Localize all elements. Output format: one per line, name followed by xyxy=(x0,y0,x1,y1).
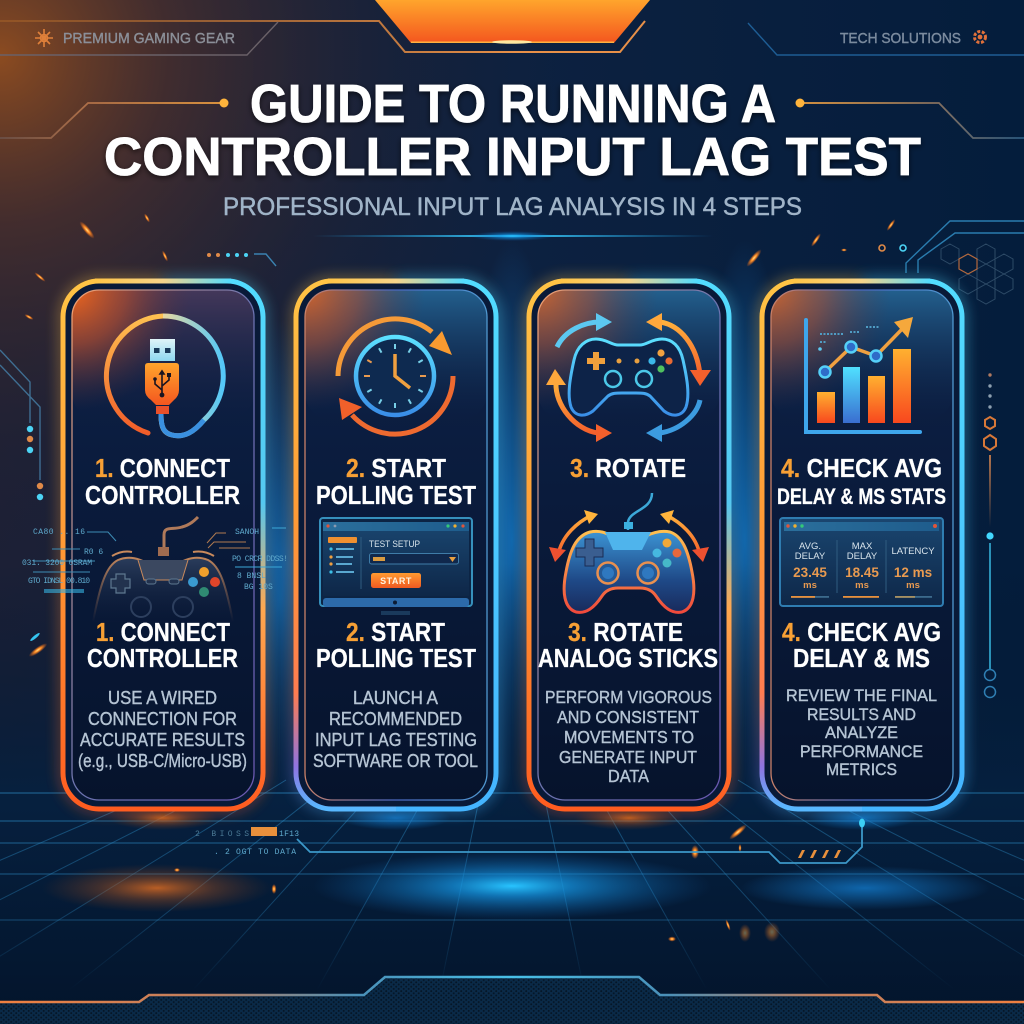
description: step 2: SOFTWARE OR TOOL xyxy=(313,751,478,771)
heading: step 1 lower: 1. CONNECT xyxy=(96,619,230,647)
stats window: 12 ms xyxy=(894,565,932,580)
panel: step 1 xyxy=(22,281,288,809)
stats window: ms xyxy=(855,580,869,591)
monitor: test setup window: START xyxy=(380,576,412,586)
title connector lines xyxy=(0,98,1024,138)
heading: step 2 lower: 2. START xyxy=(346,619,445,647)
description: step 4: RESULTS AND xyxy=(807,706,916,724)
description: step 1 xyxy=(78,688,247,771)
icon: controller with rotation arrows xyxy=(546,313,711,442)
description: step 4 xyxy=(786,687,937,779)
stats window: ms xyxy=(906,580,920,591)
heading: step 2 upper: 2. START xyxy=(346,455,446,483)
description: step 3: MOVEMENTS TO xyxy=(564,727,694,747)
stats window: DELAY xyxy=(795,551,826,562)
title: CONTROLLER INPUT LAG TEST xyxy=(104,127,921,187)
heading: step 3 lower: 3. ROTATE xyxy=(568,619,683,647)
stats window: 18.45 xyxy=(845,565,879,580)
spark: cyan xyxy=(29,632,41,642)
glowing divider xyxy=(313,231,713,241)
top center orange trapezoid xyxy=(375,0,650,44)
heading: step 1 upper: 1. CONNECT xyxy=(95,455,230,483)
icon: gamepad with analog stick arrows xyxy=(549,493,709,612)
title xyxy=(104,74,921,187)
description: step 3: AND CONSISTENT xyxy=(557,707,699,727)
data readouts around controller: SANOH xyxy=(235,528,259,537)
title: GUIDE TO RUNNING A xyxy=(250,74,776,134)
description: step 1: USE A WIRED xyxy=(108,688,217,708)
icon: clock with cycle arrows xyxy=(338,319,453,434)
subheading: analog sticks: ANALOG STICKS xyxy=(538,645,718,673)
description: step 1: CONNECTION FOR xyxy=(88,709,237,729)
floor grid xyxy=(0,780,1024,990)
heading: step 4 upper: 4. CHECK AVG xyxy=(781,455,942,483)
left circuit decoration xyxy=(0,350,43,500)
description: step 4: REVIEW THE FINAL xyxy=(786,687,937,705)
icon: bar chart with trend arrow xyxy=(806,317,920,432)
data readouts around controller: GTO IDNSL 00.810 xyxy=(28,577,90,586)
panel frame 1 xyxy=(63,281,263,809)
subheading: polling test lower: POLLING TEST xyxy=(316,645,476,673)
description: step 4: ANALYZE xyxy=(825,724,898,742)
description: step 3: DATA xyxy=(608,766,649,786)
data readouts around controller: PO CRCR DDSS! xyxy=(232,555,288,564)
panel frame 3 xyxy=(529,281,729,809)
lower data labels: . 2 OGT TO DATA xyxy=(214,848,296,857)
description: step 2: RECOMMENDED xyxy=(329,709,462,729)
subheading: polling test upper: POLLING TEST xyxy=(316,482,476,510)
stats window: ms xyxy=(803,580,817,591)
icon: wired controller xyxy=(93,517,233,622)
lower data labels xyxy=(195,827,299,857)
description: step 3: PERFORM VIGOROUS xyxy=(545,687,712,707)
brand: premium gaming gear: PREMIUM GAMING GEAR xyxy=(63,31,235,47)
lower data labels: 2 BIOSS xyxy=(195,830,249,839)
subtitle: PROFESSIONAL INPUT LAG ANALYSIS IN 4 STEPS xyxy=(223,193,802,221)
icon: premium gaming gear star xyxy=(35,29,53,47)
stats window: AVG. xyxy=(799,541,821,552)
data readouts around controller xyxy=(22,528,288,593)
stats window xyxy=(780,518,943,606)
description: step 3: GENERATE INPUT xyxy=(559,747,697,767)
subheading: controller upper: CONTROLLER xyxy=(85,482,240,510)
stats window: LATENCY xyxy=(891,546,935,557)
description: step 4: METRICS xyxy=(826,761,897,779)
description: step 2 xyxy=(313,688,478,771)
description: step 1: ACCURATE RESULTS xyxy=(80,730,245,750)
stats window: DELAY xyxy=(847,551,878,562)
heading: step 3 upper: 3. ROTATE xyxy=(570,455,686,483)
data readouts around controller: CA80 .. 16 xyxy=(33,528,85,537)
top header frame lines xyxy=(0,21,1024,55)
small dots upper left of panels xyxy=(207,253,276,266)
floor glows xyxy=(42,806,990,920)
data readouts around controller: BG 10S xyxy=(244,583,273,592)
monitor: test setup window xyxy=(320,518,472,615)
panel: step 3 xyxy=(529,281,729,809)
panel frame 2 xyxy=(296,281,496,809)
icon: usb plug in ring xyxy=(106,316,223,436)
stats window: MAX xyxy=(852,541,873,552)
brand: tech solutions: TECH SOLUTIONS xyxy=(840,31,961,47)
description: step 2: LAUNCH A xyxy=(353,688,438,708)
right circuit and hexagon decoration xyxy=(879,221,1024,304)
description: step 2: INPUT LAG TESTING xyxy=(315,730,477,750)
lower circuit trace xyxy=(297,818,865,863)
icon: tech solutions gear xyxy=(974,32,986,42)
subheading: delay and ms stats: DELAY & MS STATS xyxy=(777,484,946,509)
sparks xyxy=(24,213,896,942)
data readouts around controller: 031. 3200 0SRAM xyxy=(22,559,92,568)
lower data labels: 1F13 xyxy=(279,830,299,839)
panel: step 4 xyxy=(762,281,962,809)
description: step 3 xyxy=(545,687,712,786)
subheading: delay and ms: DELAY & MS xyxy=(793,645,930,673)
description: step 4: PERFORMANCE xyxy=(800,743,923,761)
heading: step 4 lower: 4. CHECK AVG xyxy=(782,619,941,647)
data readouts around controller: 8 BNSL xyxy=(237,572,266,581)
stats window: 23.45 xyxy=(793,565,827,580)
description: step 1: (e.g., USB-C/Micro-USB) xyxy=(78,751,247,771)
data readouts around controller: R0 6 xyxy=(84,548,103,557)
panel frame 4 xyxy=(762,281,962,809)
panel: step 2 xyxy=(296,281,496,809)
right dot and node column xyxy=(984,373,996,698)
subheading: controller lower: CONTROLLER xyxy=(87,645,238,673)
footer bar xyxy=(0,977,1024,1024)
monitor: test setup window: TEST SETUP xyxy=(369,539,420,549)
